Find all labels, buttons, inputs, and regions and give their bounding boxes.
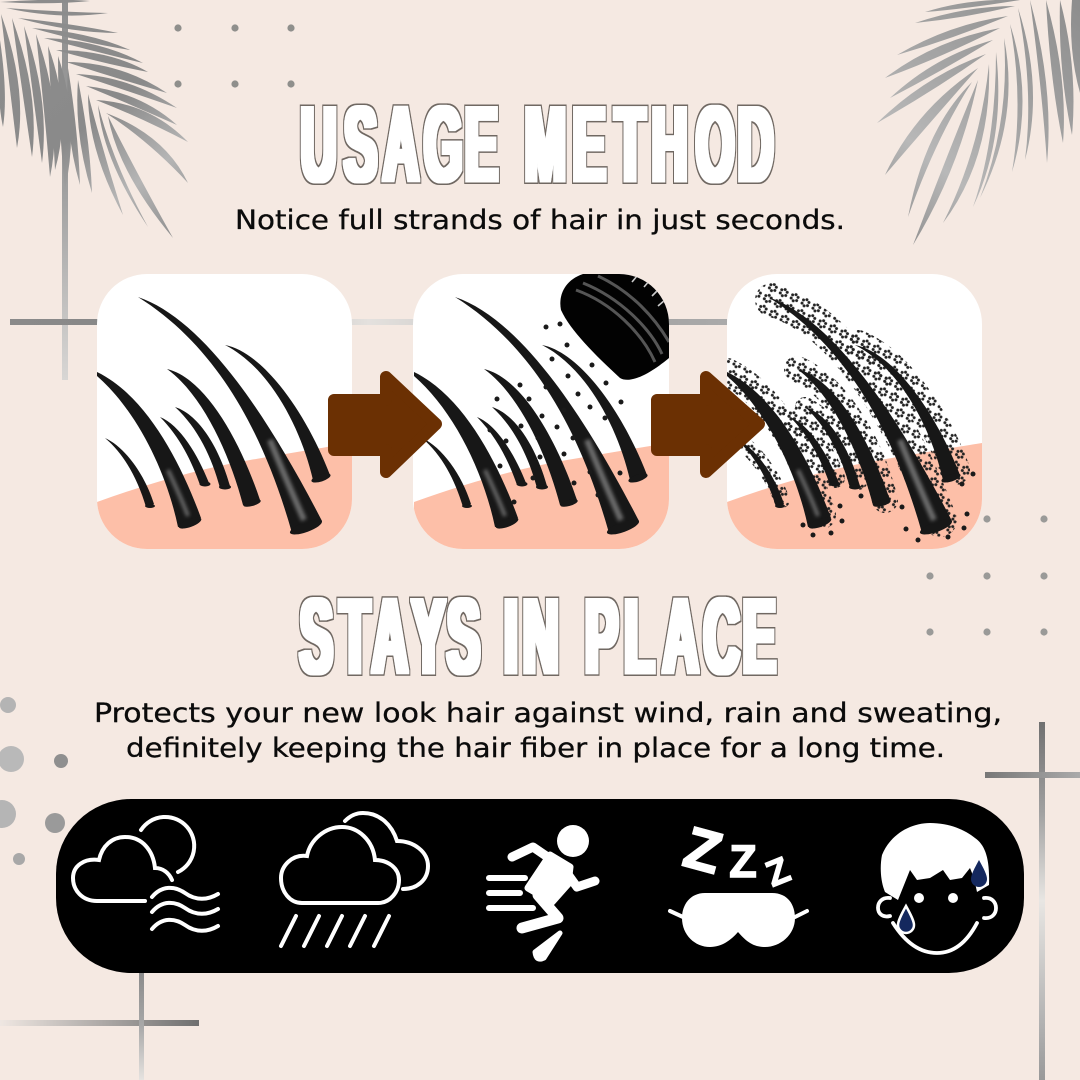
skin bbox=[97, 443, 352, 552]
panel: full hair with fibers bbox=[727, 274, 982, 552]
icon: sleep mask bbox=[670, 815, 807, 947]
icon: rain bbox=[281, 813, 428, 946]
fiber clusters bbox=[727, 300, 955, 520]
text: protects your new look bbox=[94, 698, 1002, 764]
decor: bottom-left cross bbox=[0, 972, 199, 1080]
icon: sleep mask: Z bbox=[729, 836, 757, 887]
icon: running person bbox=[489, 825, 595, 959]
skin bbox=[727, 443, 982, 552]
decor: top-left cross bbox=[10, 0, 727, 380]
subheading: notice full strands: Notice full strands of hair in just seconds. bbox=[235, 205, 845, 236]
panel: black icon bar bbox=[56, 799, 1024, 973]
icon: sleep mask: Z bbox=[677, 815, 728, 886]
decor: right dot grid bbox=[926, 515, 1048, 636]
loose fibers bbox=[800, 472, 976, 542]
hair strands bbox=[97, 297, 332, 538]
heading: usage method: USAGE METHOD bbox=[301, 85, 773, 204]
icon: wind bbox=[73, 817, 218, 931]
palm leaf: top left bbox=[0, 0, 188, 238]
arrow: step one to two bbox=[334, 377, 436, 472]
palm leaf: top right bbox=[877, 0, 1080, 245]
decor: right cross bbox=[985, 722, 1080, 1080]
text: protects your new look: definitely keeping the hair fiber in place for a long time. bbox=[126, 733, 945, 764]
fiber jar bbox=[560, 274, 669, 380]
hair strands bbox=[414, 297, 649, 538]
arrow: step two to three bbox=[657, 377, 759, 472]
heading: stays in place: STAYS IN PLACE bbox=[300, 577, 776, 696]
panel: bare hair bbox=[97, 274, 352, 552]
decor: left bubbles bbox=[0, 697, 68, 865]
falling fibers bbox=[488, 322, 624, 504]
decor: top dot grid bbox=[174, 24, 295, 88]
panel: applying fibers bbox=[413, 274, 669, 552]
icon: sleep mask: Z bbox=[760, 848, 796, 895]
hair strands bbox=[727, 297, 962, 538]
icon: sweating face bbox=[878, 823, 996, 953]
skin bbox=[414, 443, 669, 552]
text: protects your new look: Protects your new look hair against wind, rain and sweating, bbox=[94, 698, 1002, 729]
